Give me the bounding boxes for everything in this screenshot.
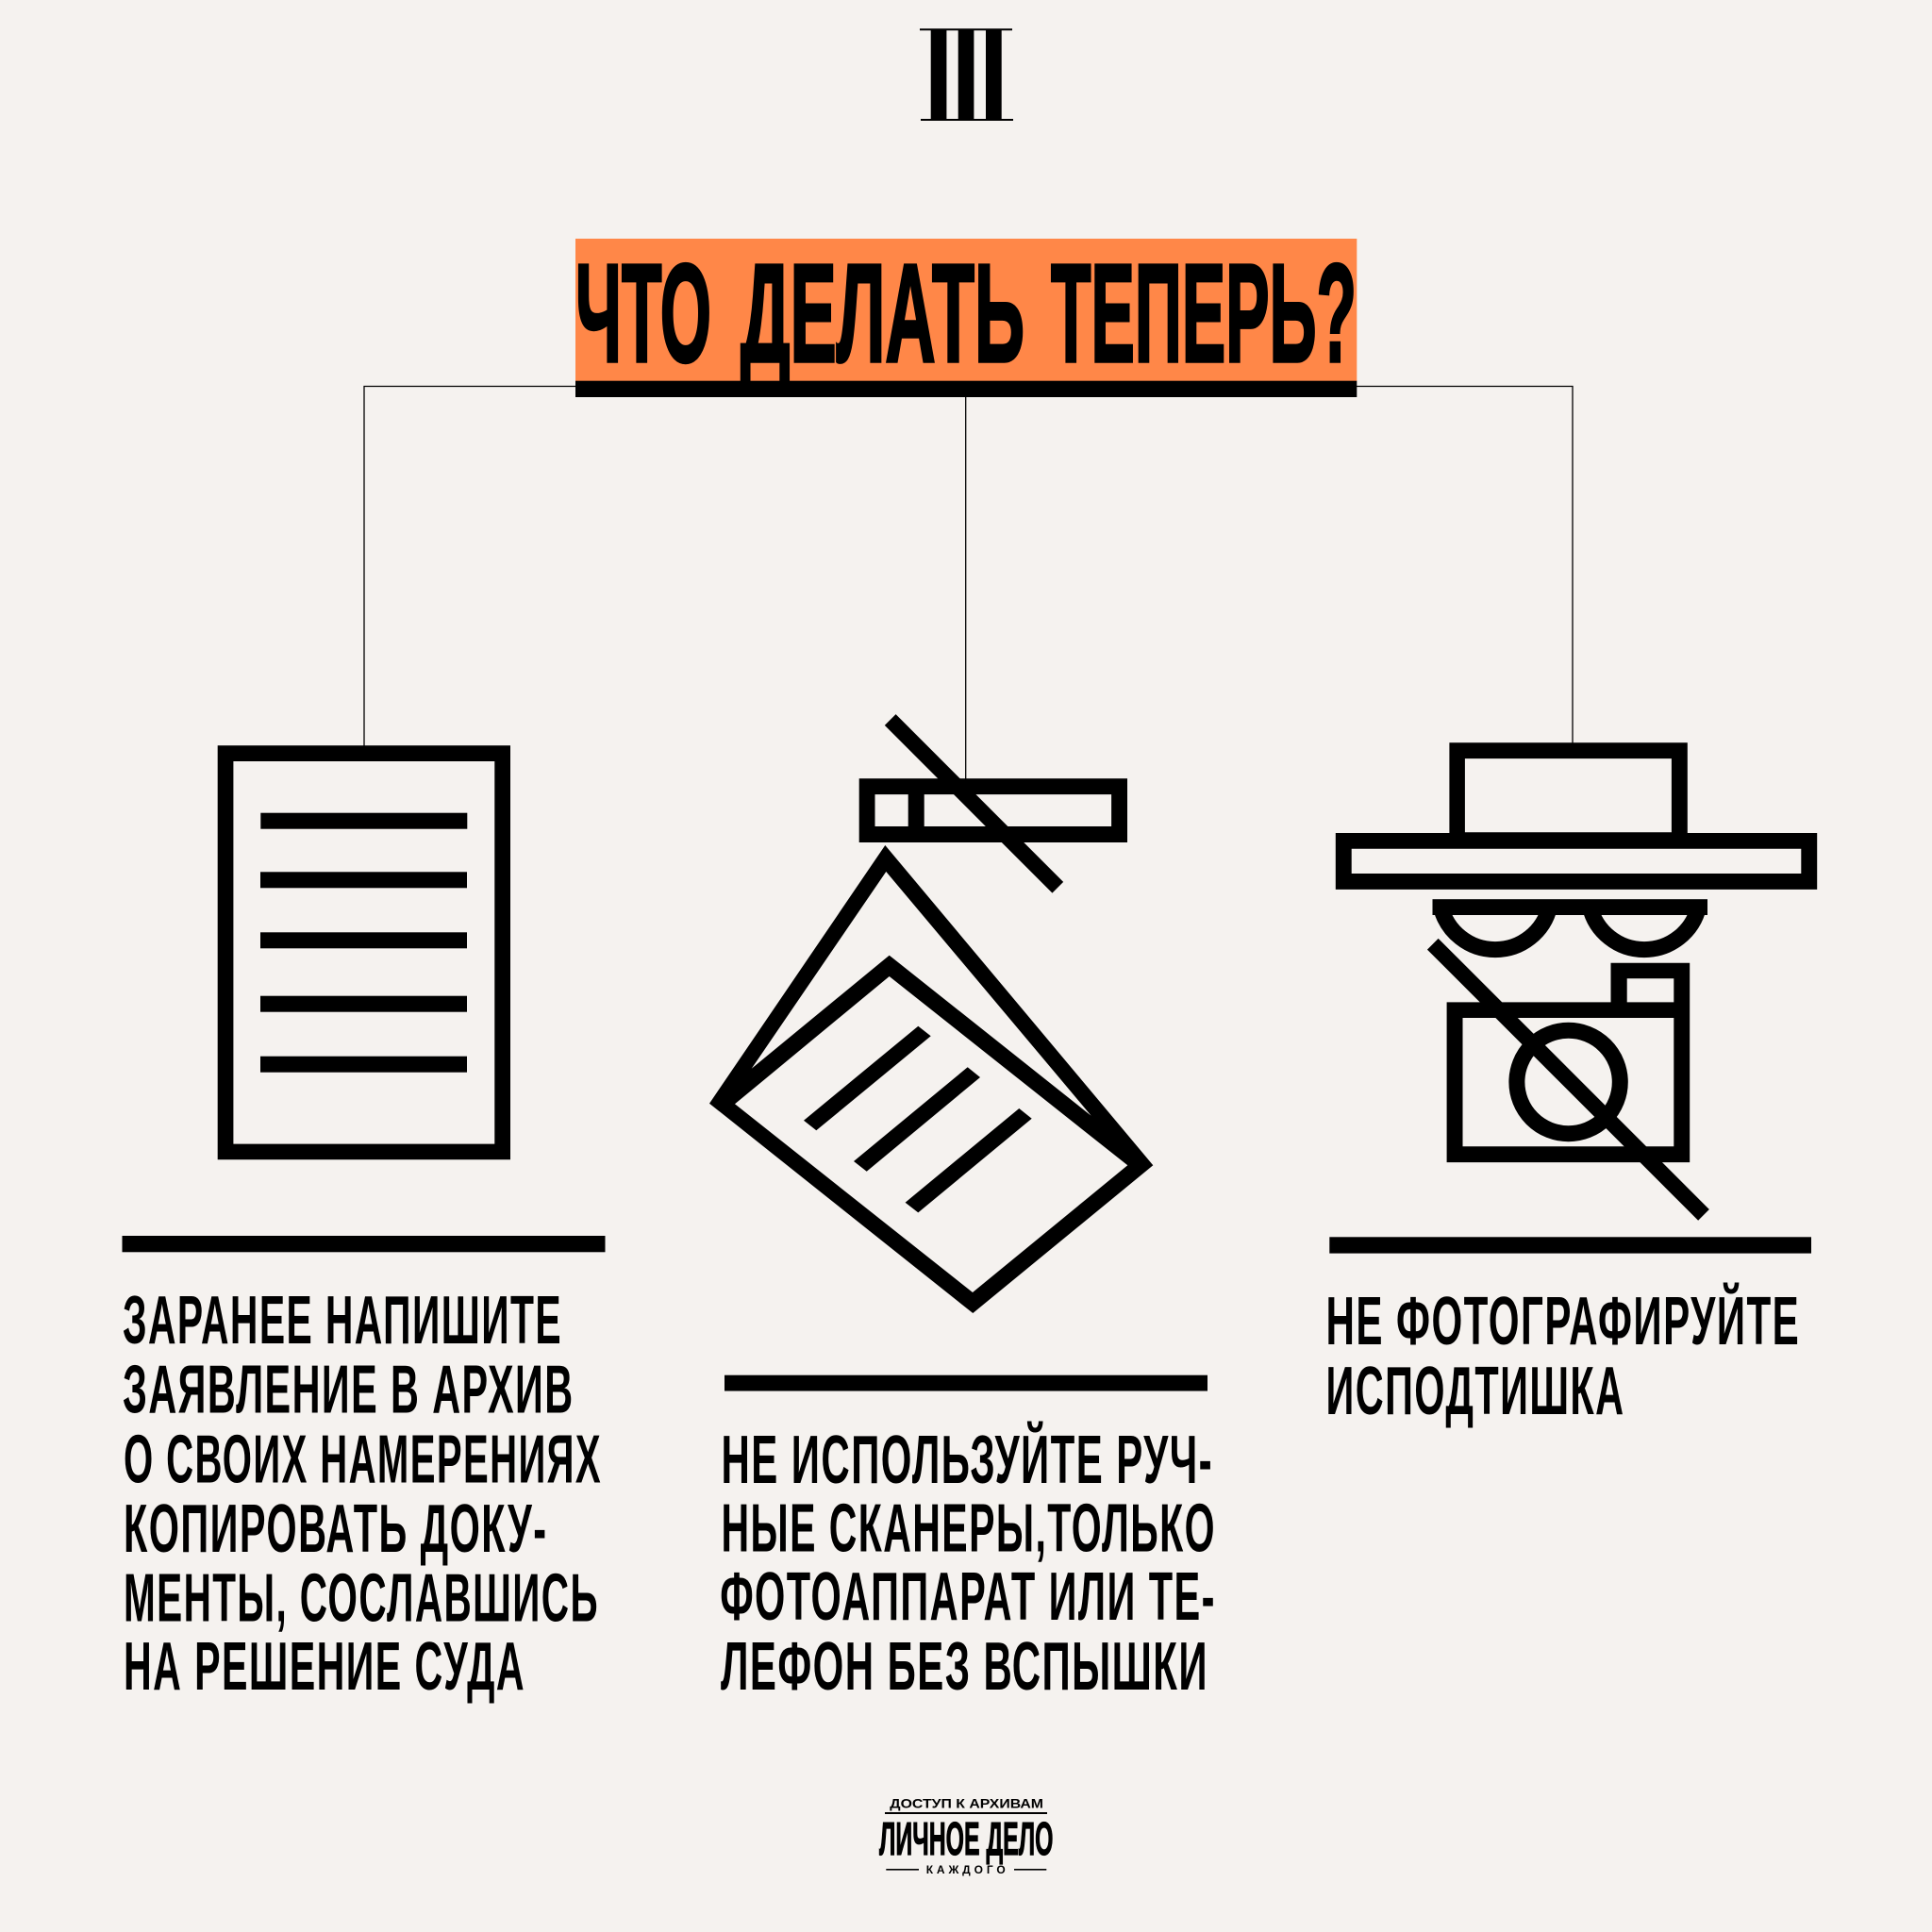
column 1 text: ЗАЯВЛЕНИЕ В АРХИВ [123, 1352, 574, 1428]
column 2 text: ЛЕФОН БЕЗ ВСПЫШКИ [721, 1628, 1208, 1705]
column 1 text: МЕНТЫ, СОСЛАВШИСЬ [124, 1559, 599, 1636]
column 2 text [720, 1421, 1216, 1705]
title: ДЕЛАТЬ [741, 236, 1024, 391]
camera [1447, 963, 1690, 1162]
column 1 text: О СВОИХ НАМЕРЕНИЯХ [124, 1421, 602, 1497]
roman numeral III [920, 28, 1013, 121]
connector lines [364, 387, 1573, 779]
column 2 text: ФОТОАППАРАТ ИЛИ ТЕ- [720, 1558, 1216, 1635]
title: ЧТО [575, 236, 711, 391]
column 2 text: НЕ ИСПОЛЬЗУЙТЕ РУЧ- [721, 1421, 1213, 1498]
column 1 text: КОПИРОВАТЬ ДОКУ- [124, 1491, 547, 1567]
column 2 text: НЫЕ СКАНЕРЫ,ТОЛЬКО [721, 1491, 1216, 1566]
hat [1336, 742, 1817, 890]
column 1 text [123, 1282, 602, 1705]
logo: ЛИЧНОЕ ДЕЛО [879, 1814, 1053, 1865]
icon: hat, glasses and crossed-out camera [1336, 742, 1817, 1215]
column 1 bar [123, 1236, 606, 1252]
glasses [1432, 899, 1707, 950]
column 3 bar [1329, 1237, 1811, 1254]
column 3 text [1326, 1282, 1800, 1429]
logo: КАЖДОГО [926, 1863, 1006, 1876]
column 3 text: ИСПОДТИШКА [1326, 1353, 1624, 1429]
column 1 text: ЗАРАНЕЕ НАПИШИТЕ [123, 1282, 562, 1358]
icon: document [218, 745, 510, 1159]
column 1 text: НА РЕШЕНИЕ СУДА [124, 1628, 525, 1705]
text: ТЕПЕРЬ? [1051, 236, 1357, 391]
column 2 bar [724, 1375, 1208, 1391]
logo: ДОСТУП К АРХИВАМ [890, 1797, 1043, 1811]
logo [879, 1797, 1053, 1876]
icon: crossed-out flash over document [709, 720, 1153, 1313]
